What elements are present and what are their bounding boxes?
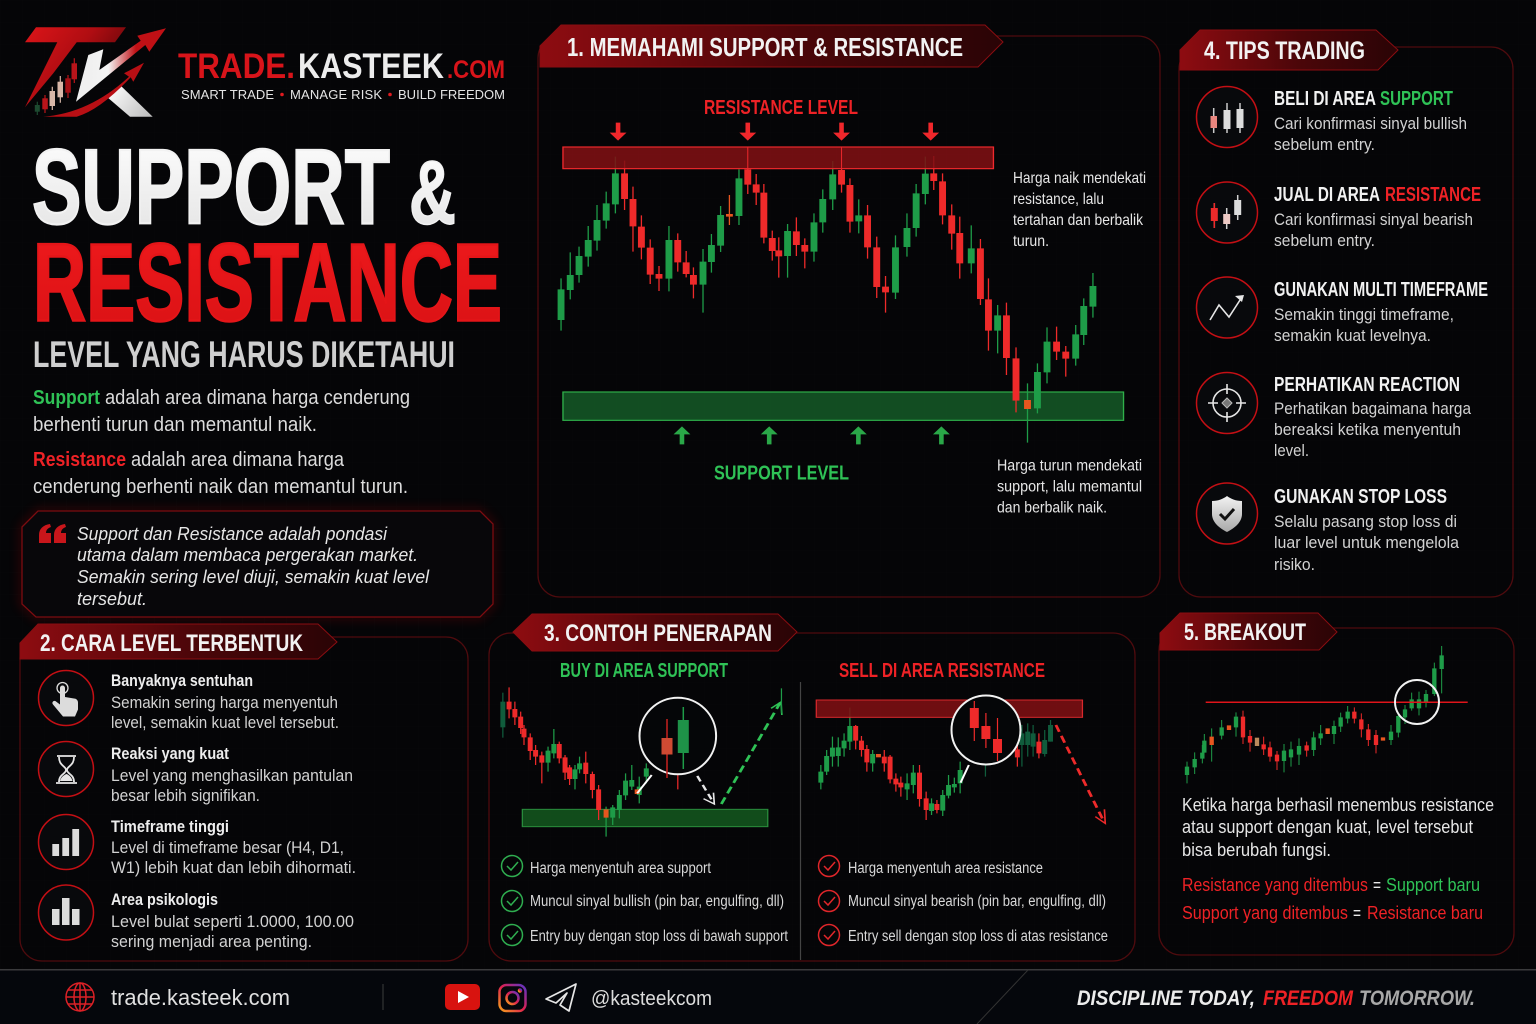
chart: buy at support <box>503 687 782 837</box>
callout: quote: utama dalam membaca pergerakan market. <box>77 545 418 565</box>
heading: panel 5 <box>1160 613 1337 650</box>
tip: gunakan stop loss: risiko. <box>1274 556 1315 574</box>
brand name: TRADE. <box>178 47 295 86</box>
checklist: buy <box>502 856 789 946</box>
heading: panel 1: 1. MEMAHAMI SUPPORT & RESISTANCE <box>567 32 963 62</box>
item: reaksi yang kuat: besar lebih signifikan. <box>111 787 260 805</box>
icon: hand <box>38 670 94 726</box>
icon: bars <box>38 885 94 940</box>
icon: bearish candles <box>1196 182 1258 243</box>
panel: 1 memahami support resistance <box>538 25 1160 597</box>
item: banyaknya sentuhan <box>38 670 339 732</box>
rule: role reversal: Resistance baru <box>1367 903 1483 923</box>
heading: buy: BUY DI AREA SUPPORT <box>560 660 728 682</box>
website: trade.kasteek.com <box>111 985 290 1010</box>
note: support: support, lalu memantul <box>997 478 1142 496</box>
definitions: Resistance <box>33 449 126 471</box>
heading: panel 2 <box>20 624 337 659</box>
rule: role reversal: Support yang ditembus <box>1182 903 1348 923</box>
item: area psikologis: sering menjadi area penting. <box>111 933 312 951</box>
slogan <box>1077 987 1475 1010</box>
definitions: Support <box>33 387 100 409</box>
tip: beli di area support <box>1196 86 1467 154</box>
icon: instagram <box>500 985 526 1011</box>
tip: perhatikan reaction: Perhatikan bagaimana harga <box>1274 400 1472 418</box>
tip: gunakan stop loss: Selalu pasang stop loss di <box>1274 513 1457 531</box>
chart: sell at resistance <box>816 700 1105 823</box>
rule: role reversal: = <box>1353 903 1361 923</box>
note: resistance: tertahan dan berbalik <box>1013 212 1144 229</box>
brand name: .COM <box>447 56 505 84</box>
definitions <box>33 387 410 498</box>
tip: perhatikan reaction: PERHATIKAN REACTION <box>1274 374 1460 396</box>
arrows: support touches <box>674 426 950 444</box>
tagline: BUILD FREEDOM <box>398 87 505 102</box>
tip: gunakan multi timeframe: semakin kuat levelnya. <box>1274 327 1431 345</box>
item: area psikologis <box>38 885 354 951</box>
item: banyaknya sentuhan: Semakin sering harga menyentuh <box>111 694 338 712</box>
rule: role reversal: Resistance yang ditembus <box>1182 875 1368 895</box>
checklist: buy: Harga menyentuh area support <box>530 860 712 877</box>
icon: shield <box>1196 483 1258 544</box>
note: resistance: turun. <box>1013 233 1049 250</box>
slogan: DISCIPLINE TODAY, <box>1077 987 1255 1010</box>
explanation: atau support dengan kuat, level tersebut <box>1182 817 1473 837</box>
label: resistance level: RESISTANCE LEVEL <box>704 97 858 119</box>
item: timeframe tinggi: W1) lebih kuat dan lebih dihormati. <box>111 859 356 877</box>
heading: panel 5: 5. BREAKOUT <box>1184 619 1306 646</box>
item: area psikologis: Area psikologis <box>111 890 218 909</box>
panel: 3 contoh penerapan <box>489 614 1135 961</box>
icon: youtube <box>445 984 480 1010</box>
tip: jual di area resistance: JUAL DI AREA <box>1274 184 1380 206</box>
tip: perhatikan reaction: level. <box>1274 442 1309 460</box>
note: support: Harga turun mendekati <box>997 458 1142 474</box>
callout: sell candles zoom <box>952 696 1020 764</box>
tip: gunakan stop loss <box>1196 483 1460 574</box>
icon: telegram <box>546 984 576 1011</box>
icon: globe <box>66 983 94 1011</box>
tip: gunakan stop loss: luar level untuk mengelola <box>1274 534 1460 552</box>
chart: breakout <box>1187 646 1442 783</box>
checklist: sell: Muncul sinyal bearish (pin bar, engulfing, dll) <box>848 893 1106 910</box>
icon: hourglass <box>38 742 94 796</box>
title: & <box>409 144 456 244</box>
title: RESISTANCE <box>33 222 502 344</box>
checklist: sell <box>818 856 1108 946</box>
chart: main candlesticks <box>561 123 1124 444</box>
icon: quote mark <box>39 524 66 543</box>
explanation <box>1182 795 1494 860</box>
tip: jual di area resistance: RESISTANCE <box>1385 184 1481 206</box>
heading: panel 4: 4. TIPS TRADING <box>1204 37 1365 65</box>
rule: role reversal <box>1182 875 1483 923</box>
tip: beli di area support: SUPPORT <box>1380 88 1453 110</box>
tip: jual di area resistance <box>1196 182 1481 250</box>
explanation: Ketika harga berhasil menembus resistance <box>1182 795 1494 815</box>
tip: beli di area support: BELI DI AREA <box>1274 88 1376 110</box>
title: SUPPORT <box>32 126 390 246</box>
checklist: buy: Entry buy dengan stop loss di bawah support <box>530 928 789 945</box>
note: support: dan berbalik naik. <box>997 500 1107 516</box>
checklist: buy: Muncul sinyal bullish (pin bar, engulfing, dll) <box>530 893 784 910</box>
tagline: SMART TRADE <box>181 87 274 102</box>
icon: target <box>1196 372 1258 434</box>
logo <box>25 27 166 117</box>
brand name: KASTEEK <box>298 47 444 86</box>
tip: beli di area support: sebelum entry. <box>1274 136 1375 154</box>
heading: panel 1 <box>540 25 1003 67</box>
item: timeframe tinggi <box>38 814 356 877</box>
item: timeframe tinggi: Timeframe tinggi <box>111 817 229 836</box>
definitions: adalah area dimana harga <box>131 449 345 471</box>
definitions: cenderung berhenti naik dan memantul turun. <box>33 476 408 498</box>
rule: role reversal: Support baru <box>1386 875 1480 895</box>
title <box>32 126 502 344</box>
arrows: resistance touches <box>610 123 939 141</box>
item: reaksi yang kuat <box>38 742 353 805</box>
panel: 2 cara level terbentuk <box>20 624 468 961</box>
rule: role reversal: = <box>1373 875 1381 895</box>
checklist: sell: Entry sell dengan stop loss di atas resistance <box>848 928 1108 945</box>
tip: beli di area support: Cari konfirmasi sinyal bullish <box>1274 115 1467 133</box>
callout: quote: Semakin sering level diuji, semakin kuat level <box>77 567 430 587</box>
footer <box>0 969 1536 1024</box>
tip: jual di area resistance: Cari konfirmasi sinyal bearish <box>1274 211 1473 229</box>
breakout highlight circle <box>1395 680 1439 724</box>
definitions: berhenti turun dan memantul naik. <box>33 414 317 436</box>
item: timeframe tinggi: Level di timeframe besar (H4, D1, <box>111 839 344 857</box>
tagline: MANAGE RISK <box>290 87 382 102</box>
icon: candles <box>1196 86 1258 148</box>
brand name <box>178 47 505 86</box>
slogan: FREEDOM <box>1263 987 1353 1010</box>
heading: panel 4 <box>1180 30 1398 70</box>
note: support <box>997 458 1142 516</box>
item: reaksi yang kuat: Level yang menghasilkan pantulan <box>111 767 353 785</box>
heading: panel 3 <box>513 614 797 651</box>
item: area psikologis: Level bulat seperti 1.0000, 100.00 <box>111 913 354 931</box>
callout: buy candles zoom <box>640 698 716 778</box>
heading: panel 3: 3. CONTOH PENERAPAN <box>544 620 772 647</box>
subtitle: LEVEL YANG HARUS DIKETAHUI <box>33 334 455 375</box>
divider between examples <box>800 682 802 960</box>
tip: jual di area resistance: sebelum entry. <box>1274 232 1375 250</box>
label: support level: SUPPORT LEVEL <box>714 462 849 484</box>
resistance line <box>1206 701 1468 703</box>
item: banyaknya sentuhan: level, semakin kuat level tersebut. <box>111 714 339 732</box>
heading: panel 2: 2. CARA LEVEL TERBENTUK <box>40 630 304 657</box>
tip: perhatikan reaction <box>1196 372 1472 460</box>
callout: quote: tersebut. <box>77 589 147 609</box>
checklist: sell: Harga menyentuh area resistance <box>848 860 1043 877</box>
panel: 5 breakout <box>1159 613 1514 955</box>
icon: rising chart <box>1196 277 1258 338</box>
slogan: TOMORROW. <box>1359 987 1475 1010</box>
tip: gunakan stop loss: GUNAKAN STOP LOSS <box>1274 486 1447 508</box>
definitions: adalah area dimana harga cenderung <box>105 387 410 409</box>
tip: gunakan multi timeframe: Semakin tinggi timeframe, <box>1274 306 1454 324</box>
item: banyaknya sentuhan: Banyaknya sentuhan <box>111 671 253 690</box>
note: resistance <box>1013 170 1146 250</box>
icon: rising bars <box>38 814 94 870</box>
panel: 4 tips trading <box>1179 30 1513 597</box>
note: resistance: resistance, lalu <box>1013 191 1104 208</box>
item: reaksi yang kuat: Reaksi yang kuat <box>111 744 229 763</box>
tip: perhatikan reaction: bereaksi ketika menyentuh <box>1274 421 1461 439</box>
social handle: @kasteekcom <box>591 988 712 1010</box>
explanation: bisa berubah fungsi. <box>1182 840 1331 860</box>
note: resistance: Harga naik mendekati <box>1013 170 1146 187</box>
callout: quote: Support dan Resistance adalah pondasi <box>77 524 388 544</box>
tip: gunakan multi timeframe <box>1196 277 1488 345</box>
tagline <box>181 87 505 102</box>
callout: quote <box>22 511 493 617</box>
heading: sell: SELL DI AREA RESISTANCE <box>839 660 1045 682</box>
